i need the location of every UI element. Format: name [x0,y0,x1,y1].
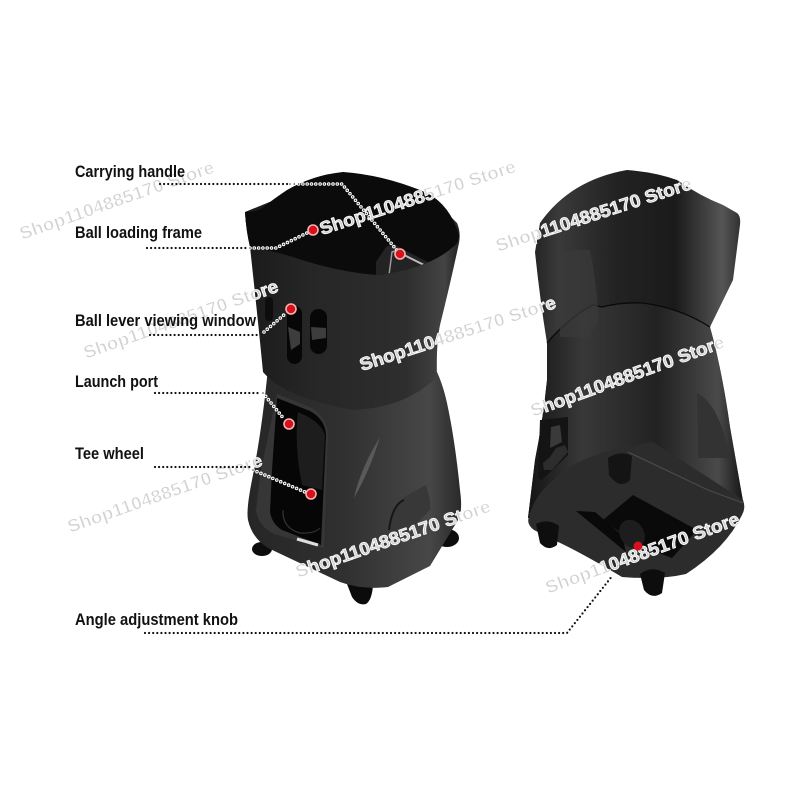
leader: launch port chain [263,393,284,419]
foot: left [252,542,272,556]
leader: tee wheel dots [155,466,250,468]
watermark 6: Shop1104885170 Store [293,496,493,582]
watermark 2: Shop1104885170 Store [317,156,518,239]
wheel ring [283,510,320,533]
base handle recess [389,485,430,535]
watermark 7: Shop1104885170 Store [493,173,694,256]
watermark 3: Shop1104885170 Store [81,276,281,363]
foot: top center [608,453,632,484]
base body [248,368,461,588]
port interior [270,398,326,545]
slot: right [310,309,327,354]
callout: launch port [75,373,294,429]
marker: carrying handle [395,249,405,259]
watermark group [17,156,742,598]
plug [543,445,568,470]
machine: front view [245,172,461,604]
recess shadow line [389,500,404,530]
watermark 8: Shop1104885170 Store [528,332,727,421]
right recess panel [697,393,730,458]
watermark 5: Shop1104885170 Store [65,450,265,537]
leader: carrying handle dots [160,183,290,185]
machine: rear view [528,170,744,596]
carrying handle [376,245,428,275]
foot: front center [640,569,665,596]
leader: ball loading frame chain [250,233,307,248]
callout: tee wheel [75,445,316,499]
marker: knob [634,542,642,550]
foot: lower left [536,521,559,548]
cup interior [245,172,459,275]
marker: ball loading frame [308,225,318,235]
port frame [256,394,328,548]
underside ridge [628,452,743,503]
leader: viewing window dots [150,334,260,336]
lower rear shading [528,303,744,518]
label: tee wheel: Tee wheel [75,445,144,463]
white slit [297,539,318,545]
slot: left [265,297,273,321]
marker: launch port [284,419,294,429]
underside [528,442,744,578]
callout: angle adjustment knob [75,542,642,633]
label: angle adjustment knob: Angle adjustment knob [75,611,238,629]
watermark 1: Shop1104885170 Store [17,157,217,244]
leader: ball loading frame dots [147,247,248,249]
angle adjustment knob [576,511,650,553]
callout: ball loading frame [75,224,318,248]
seam [547,303,710,343]
power socket [538,417,568,480]
switch [550,425,562,448]
leader: viewing window chain [264,314,285,332]
foot: far right [712,507,738,529]
viewing slots [265,297,327,364]
foot: right [435,529,459,547]
label: ball loading frame: Ball loading frame [75,224,202,242]
leader: tee wheel chain [253,470,305,492]
leader: launch port dots [155,392,260,394]
tee wheel [297,412,325,490]
leader: knob dots [145,575,613,633]
back recess panel [558,250,598,337]
label: carrying handle: Carrying handle [75,163,185,181]
handle stem [388,250,395,274]
label: launch port: Launch port [75,373,158,391]
upper body [245,172,460,410]
marker: viewing window [286,304,296,314]
callout: ball lever viewing window [75,304,296,335]
rear body [528,170,744,518]
slot: right highlight [311,327,326,340]
foot: front [347,584,373,604]
watermark 9: Shop1104885170 Store [543,509,742,598]
slot: center [287,306,302,364]
launch port opening [256,394,328,548]
knob wheel [614,515,650,553]
handle bar [405,254,424,265]
leader: carrying handle chain [290,184,400,254]
label: ball lever viewing window: Ball lever viewing window [75,312,256,330]
infographic canvas [20,164,744,634]
socket plate [538,417,568,480]
base crease [354,437,380,498]
callout: carrying handle [75,163,405,259]
knob lever [576,511,626,552]
watermark 4: Shop1104885170 Store [357,292,558,375]
slot: center highlight [288,327,300,350]
underside opening [603,495,697,558]
marker: tee wheel [306,489,316,499]
handle bracket [376,245,428,275]
